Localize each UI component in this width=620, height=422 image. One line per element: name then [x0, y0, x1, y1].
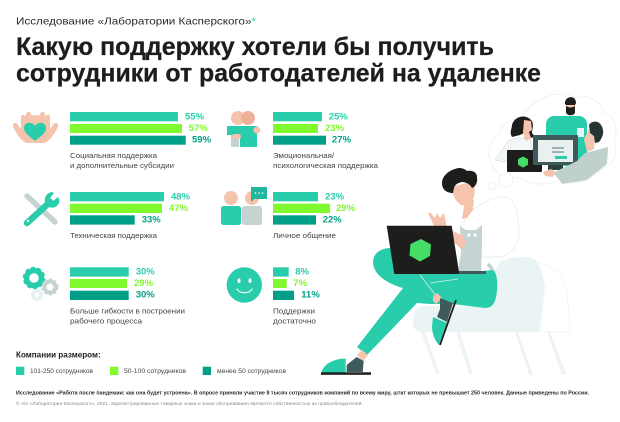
legend [16, 350, 287, 375]
cloud outline [489, 94, 616, 184]
label: social: Социальная поддержка [70, 151, 158, 160]
legend: 101-250: 101-250 сотрудников [30, 368, 94, 375]
bar chart: social: 55% [185, 112, 205, 122]
label: flexibility: рабочего процесса [70, 317, 143, 326]
panel: personal communication [221, 187, 356, 240]
bar chart: personal: 23% [325, 192, 345, 202]
subtitle: Исследование «Лаборатории Касперского» * [16, 16, 256, 28]
label: enough: достаточно [273, 317, 316, 326]
legend heading: Компании размером: [16, 350, 101, 360]
icon: hands with heart [13, 112, 58, 143]
panel: social support [13, 112, 212, 170]
label: social [70, 151, 174, 170]
icon: two people talking [221, 187, 267, 225]
bar chart: flexibility [70, 267, 155, 301]
title: сотрудники от работодателей на удаленке [16, 60, 541, 88]
woman [495, 117, 542, 172]
panel: flexibility [24, 267, 185, 326]
bar chart: technical: 48% [171, 192, 191, 202]
chair [413, 257, 570, 375]
icon: gears [24, 268, 58, 300]
bar chart: emotional: 25% [329, 112, 348, 122]
bar chart: personal: 22% [323, 215, 342, 226]
bar chart: emotional: 27% [332, 135, 352, 146]
label: flexibility: Больше гибкости в построении [70, 307, 185, 316]
lower foot [321, 350, 371, 375]
legend: under 50: менее 50 сотрудников [217, 368, 287, 375]
legend: under 50 [203, 367, 287, 375]
bar chart: flexibility: 29% [134, 278, 154, 289]
monitor [533, 135, 578, 170]
person from behind [543, 122, 608, 184]
bar chart: enough: 8% [295, 267, 310, 278]
panel: technical support [26, 192, 191, 240]
shirt [460, 197, 519, 258]
title: Какую поддержку хотели бы получить [16, 33, 494, 61]
legend: 101-250 [16, 367, 94, 375]
bar chart: social: 59% [192, 135, 212, 146]
label: social: и дополнительные субсидии [70, 161, 174, 170]
bar chart: enough [273, 267, 320, 301]
label: technical: Техническая поддержка [70, 231, 158, 240]
bar chart: technical: 33% [142, 215, 161, 226]
illustration: person at laptop on a chair [321, 168, 570, 375]
bar chart: enough: 7% [293, 278, 308, 289]
label: flexibility [70, 307, 185, 326]
icon: smiley [227, 267, 262, 303]
bar chart: technical [70, 192, 191, 226]
legend: 50-100: 50-100 сотрудников [124, 368, 187, 375]
label: enough: Поддержки [273, 307, 315, 316]
man with beard [546, 97, 587, 166]
panel: emotional support [227, 111, 379, 170]
label: enough [273, 307, 316, 326]
bar chart: technical: 47% [169, 203, 189, 214]
title [16, 33, 541, 88]
hands [428, 213, 466, 249]
bar chart: emotional: 23% [325, 123, 345, 134]
bar chart: personal: 29% [336, 203, 356, 214]
thought cloud [488, 94, 616, 190]
legend: 50-100 [110, 367, 187, 375]
cat [458, 225, 482, 272]
neck and head [442, 168, 477, 219]
label: emotional [273, 151, 379, 170]
methodology note: Исследование «Работа после пандемии: как она будет устроена». В опросе приняли участие 8 тысяч сотрудников компаний по всему миру, штат которых не превышает 250 человек. Данные приведены по России. [16, 390, 590, 397]
bar chart: emotional [273, 112, 352, 146]
bar chart: flexibility: 30% [136, 267, 155, 278]
copyright: © АО «Лаборатория Касперского», 2021. Зарегистрированные товарные знаки и знаки обслуживания являются собственностью их правообладателей. [16, 400, 363, 406]
icon: hugging people [227, 111, 260, 147]
bar chart: personal [273, 192, 356, 226]
panel: enough support [227, 267, 320, 326]
laptop [387, 226, 486, 274]
icon: wrench and screwdriver [26, 192, 59, 223]
bar chart: enough: 11% [301, 290, 320, 301]
trousers [357, 248, 497, 355]
raised foot [432, 293, 456, 345]
bar chart: social: 57% [189, 123, 208, 134]
cat tail [474, 264, 494, 283]
bar chart: flexibility: 30% [136, 290, 155, 301]
bar chart: social [70, 112, 212, 146]
label: emotional: психологическая поддержка [273, 161, 379, 170]
label: personal: Личное общение [273, 231, 336, 240]
label: emotional: Эмоциональная/ [273, 151, 335, 160]
